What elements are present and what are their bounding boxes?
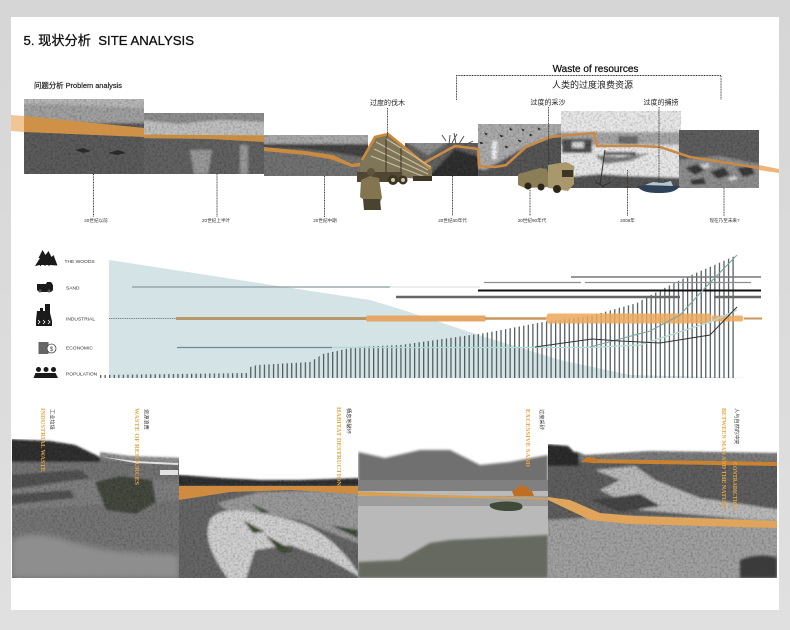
callout: over-fishing: 过度的捕捞 xyxy=(644,98,678,106)
bracket: waste of resources: 人类的过度浪费资源 xyxy=(552,79,633,90)
era: before 20th century: 20世纪以前 xyxy=(84,217,108,224)
label: industrial waste: INDUSTRIAL WASTE xyxy=(39,408,46,473)
icon: sand truck: SAND xyxy=(66,286,80,292)
label: man and nature: 人与自然的冲突 xyxy=(733,408,741,444)
callouts above the strip xyxy=(370,98,678,183)
chart: resource timelines xyxy=(100,255,762,378)
title: 5. 现状分析 SITE ANALYSIS xyxy=(24,33,194,48)
icon: the woods: THE WOODS xyxy=(64,259,95,265)
era: now and future xyxy=(709,188,740,224)
economic lines xyxy=(177,255,737,348)
callout: over-fishing xyxy=(644,98,678,183)
label: waste of resources xyxy=(133,408,150,485)
orange ribbon exit xyxy=(759,165,779,173)
orange band lead-in xyxy=(11,115,24,132)
era: early 20th century xyxy=(202,174,230,224)
panel: bottom landscape photos xyxy=(6,439,781,584)
label: man and nature: CONTRADICTION xyxy=(731,462,738,510)
icon: economic xyxy=(38,342,93,354)
population bars xyxy=(100,255,737,378)
icon: economic: ECONOMIC xyxy=(66,346,93,352)
label: habitat destruction xyxy=(335,407,353,486)
label: waste of resources: WASTE OF RESOURCES xyxy=(133,408,140,485)
icon: population: POPULATION xyxy=(66,372,98,378)
photo: fishing shacks on the water xyxy=(561,111,681,188)
label: excessive sand: 过度采砂 xyxy=(538,409,546,430)
label: man and nature: BETWEEN MAN AND THE NATURE xyxy=(720,408,727,511)
photo: industrial waste riverbank xyxy=(12,439,179,578)
photo: birds over the dredged bank xyxy=(478,124,561,176)
callout: over-logging xyxy=(370,98,405,137)
industrial band xyxy=(109,314,762,324)
era: 2006: 2006年 xyxy=(620,217,635,224)
label: habitat destruction: 栖息地破坏 xyxy=(345,408,353,435)
era: 1990s: 20世纪90年代 xyxy=(518,217,547,224)
label: industrial waste: 工业垃圾 xyxy=(48,409,56,431)
orange timeline ribbon xyxy=(424,133,759,168)
label: man and nature xyxy=(720,408,741,511)
standing man xyxy=(360,168,382,210)
label: habitat destruction: HABITAT DESTRUCTION xyxy=(335,407,342,486)
panel: timeline photo strip xyxy=(11,95,779,210)
callout: over-dredging xyxy=(530,98,566,165)
icon: economic: $ xyxy=(50,347,54,353)
section heading: problem analysis: 问题分析 Problem analysis xyxy=(34,81,122,90)
vertical labels xyxy=(39,407,741,511)
label: industrial waste xyxy=(39,408,56,473)
era: early 20th century: 20世纪上半叶 xyxy=(202,217,230,224)
fishing boat xyxy=(637,181,680,193)
photo: orange-stained shoals xyxy=(175,474,362,582)
era: before 20th century xyxy=(84,174,108,224)
era: 1960s: 20世纪60年代 xyxy=(438,217,467,224)
callout: over-logging: 过度的伐木 xyxy=(370,98,405,107)
label: excessive sand xyxy=(524,409,546,467)
bracket: waste of resources xyxy=(456,64,721,100)
photo: rubbish-strewn shore xyxy=(679,130,759,188)
icon: industrial: INDUSTRIAL xyxy=(66,316,95,322)
bracket: waste of resources: Waste of resources xyxy=(553,64,638,75)
photo: spoil heap and bare tree xyxy=(405,132,478,176)
photo: sand flats with orange path xyxy=(544,444,781,582)
woods area xyxy=(109,260,750,378)
photo: marsh under clouds xyxy=(144,113,264,174)
photo: reeds xyxy=(264,135,368,176)
tanker truck xyxy=(518,162,574,193)
era: 1990s xyxy=(518,190,547,224)
era: 1960s xyxy=(438,176,467,224)
photo: lake with ducks xyxy=(24,99,144,174)
era: mid 20th century xyxy=(313,176,337,224)
era: 2006 xyxy=(620,170,635,224)
era: now and future: 现在乃至未来? xyxy=(709,217,740,224)
sand lines xyxy=(132,277,761,297)
era timeline stems and labels xyxy=(84,170,740,224)
photo: dredged pond xyxy=(358,450,548,578)
log truck xyxy=(357,134,432,185)
chart legend xyxy=(34,250,98,378)
label: excessive sand: EXCESSIVE SAND xyxy=(524,409,531,467)
label: waste of resources: 资源浪费 xyxy=(142,409,150,430)
era: mid 20th century: 20世纪中期 xyxy=(313,217,337,224)
callout: over-dredging: 过度的采沙 xyxy=(530,98,566,106)
